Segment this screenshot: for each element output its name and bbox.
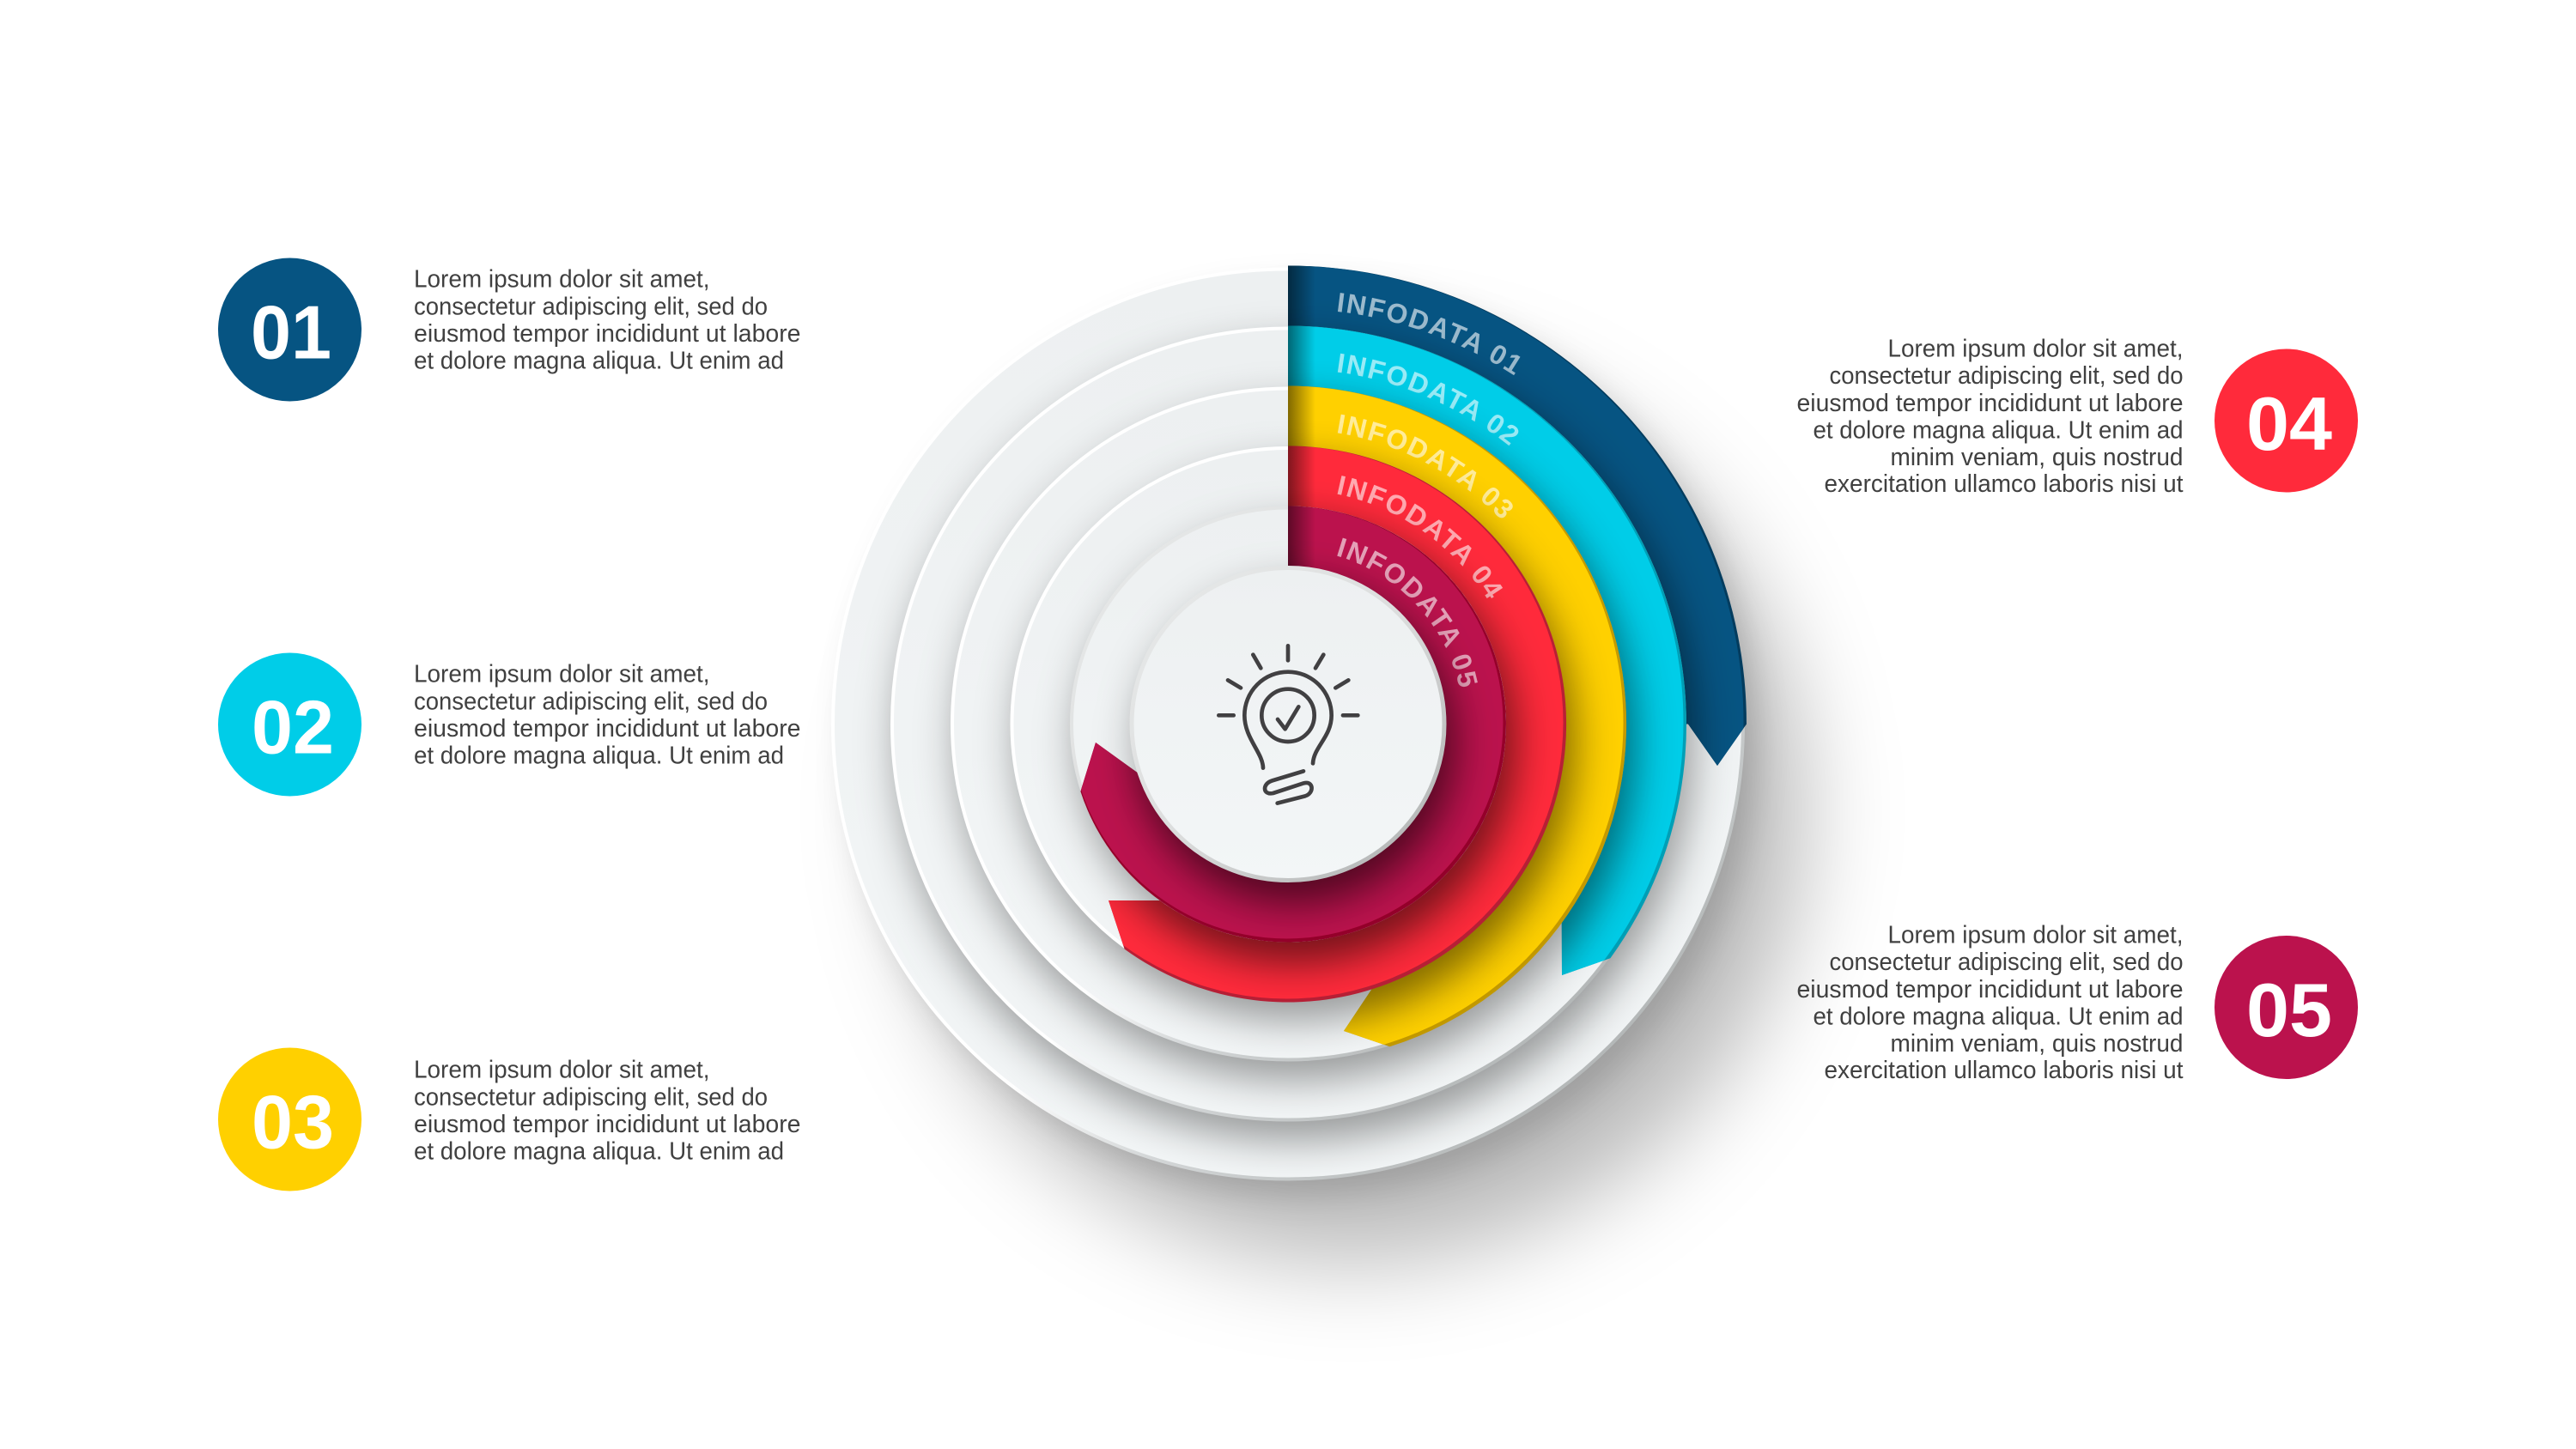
step 05: badge and text (1796, 922, 2358, 1084)
text block 04: et dolore magna aliqua. Ut enim ad (1814, 417, 2183, 445)
text block 01: Lorem ipsum dolor sit amet, (414, 266, 709, 294)
extra shadow on band 02 (1427, 415, 1649, 973)
text block 04: minim veniam, quis nostrud (1891, 444, 2183, 471)
text block 02: Lorem ipsum dolor sit amet, (414, 661, 709, 688)
badge 04: 04 (2246, 381, 2332, 466)
step 04: badge and text (1796, 335, 2358, 498)
band: infodata 05 (1080, 506, 1506, 943)
extra shadow on band 03 (1345, 457, 1590, 1033)
band: infodata 03: INFODATA 03 (1338, 414, 1513, 518)
ring 1 disc (833, 270, 1743, 1179)
band: infodata 04: INFODATA 04 (1338, 476, 1503, 598)
band: infodata 02 (1288, 326, 1686, 975)
text block 05: Lorem ipsum dolor sit amet, (1887, 922, 2183, 949)
badge 03: 03 (252, 1080, 334, 1165)
text block 01: consectetur adipiscing elit, sed do (414, 294, 768, 321)
extra shadow on band 05 (1137, 585, 1453, 901)
extra shadow on band 04 (1077, 525, 1513, 961)
text block 05: consectetur adipiscing elit, sed do (1829, 949, 2183, 976)
badge 03 (218, 1047, 361, 1191)
text block 05: minim veniam, quis nostrud (1891, 1030, 2183, 1058)
badge 01: 01 (251, 290, 331, 375)
text block 03: Lorem ipsum dolor sit amet, (414, 1056, 709, 1083)
badge 04 (2215, 349, 2358, 493)
extra shadow on band 01 (1630, 518, 1698, 737)
band: infodata 01: INFODATA 01 (1338, 293, 1520, 376)
text block 04: Lorem ipsum dolor sit amet, (1887, 335, 2183, 362)
text block 02: et dolore magna aliqua. Ut enim ad (414, 742, 784, 769)
text block 02 (414, 661, 800, 769)
ring 4 disc (1012, 448, 1564, 1000)
text block 03: consectetur adipiscing elit, sed do (414, 1083, 768, 1111)
text block 03 (414, 1056, 800, 1166)
badge 02: 02 (252, 685, 334, 770)
text block 04 (1796, 335, 2184, 498)
text block 02: eiusmod tempor incididunt ut labore (414, 715, 800, 743)
text block 01 (414, 266, 800, 374)
icon: light bulb with check mark (1218, 646, 1358, 803)
text block 05: et dolore magna aliqua. Ut enim ad (1814, 1003, 2183, 1030)
shadow of ring 3 (957, 405, 1632, 1080)
text block 03: et dolore magna aliqua. Ut enim ad (414, 1138, 784, 1166)
centre disc (1132, 568, 1444, 881)
step 01: badge and text (218, 258, 800, 402)
text block 05 (1796, 922, 2184, 1084)
text block 03: eiusmod tempor incididunt ut labore (414, 1111, 800, 1138)
soft drop shadow of the outer disc (847, 285, 1803, 1262)
infographic canvas (218, 258, 2358, 1313)
ring 2 disc (892, 328, 1684, 1119)
text block 04: eiusmod tempor incididunt ut labore (1796, 390, 2183, 417)
text block 04: exercitation ullamco laboris nisi ut (1824, 470, 2184, 498)
badge 02 (218, 652, 361, 797)
text block 05: eiusmod tempor incididunt ut labore (1796, 976, 2183, 1003)
shadow of centre disc (1137, 585, 1453, 901)
shadow of ring 2 (897, 345, 1692, 1140)
badge 05 (2215, 936, 2358, 1079)
text block 04: consectetur adipiscing elit, sed do (1829, 362, 2183, 390)
band: infodata 04 (1109, 446, 1566, 1003)
shadow of ring 5 (1077, 525, 1513, 961)
concentric ring chart (831, 266, 1838, 1296)
band: infodata 01 (1288, 266, 1747, 766)
ring 5 disc (1072, 508, 1504, 941)
shadow of ring 4 (1017, 465, 1573, 1021)
badge 01 (218, 258, 361, 402)
text block 05: exercitation ullamco laboris nisi ut (1824, 1057, 2184, 1084)
text block 01: et dolore magna aliqua. Ut enim ad (414, 347, 784, 374)
ring 3 disc (952, 388, 1624, 1059)
band: infodata 02: INFODATA 02 (1338, 354, 1518, 446)
step 03: badge and text (218, 1047, 800, 1191)
band: infodata 03 (1288, 386, 1626, 1047)
badge 05: 05 (2246, 967, 2332, 1052)
band: infodata 05: INFODATA 05 (1337, 537, 1478, 687)
step 02: badge and text (218, 652, 800, 797)
text block 01: eiusmod tempor incididunt ut labore (414, 320, 800, 348)
text block 02: consectetur adipiscing elit, sed do (414, 688, 768, 716)
